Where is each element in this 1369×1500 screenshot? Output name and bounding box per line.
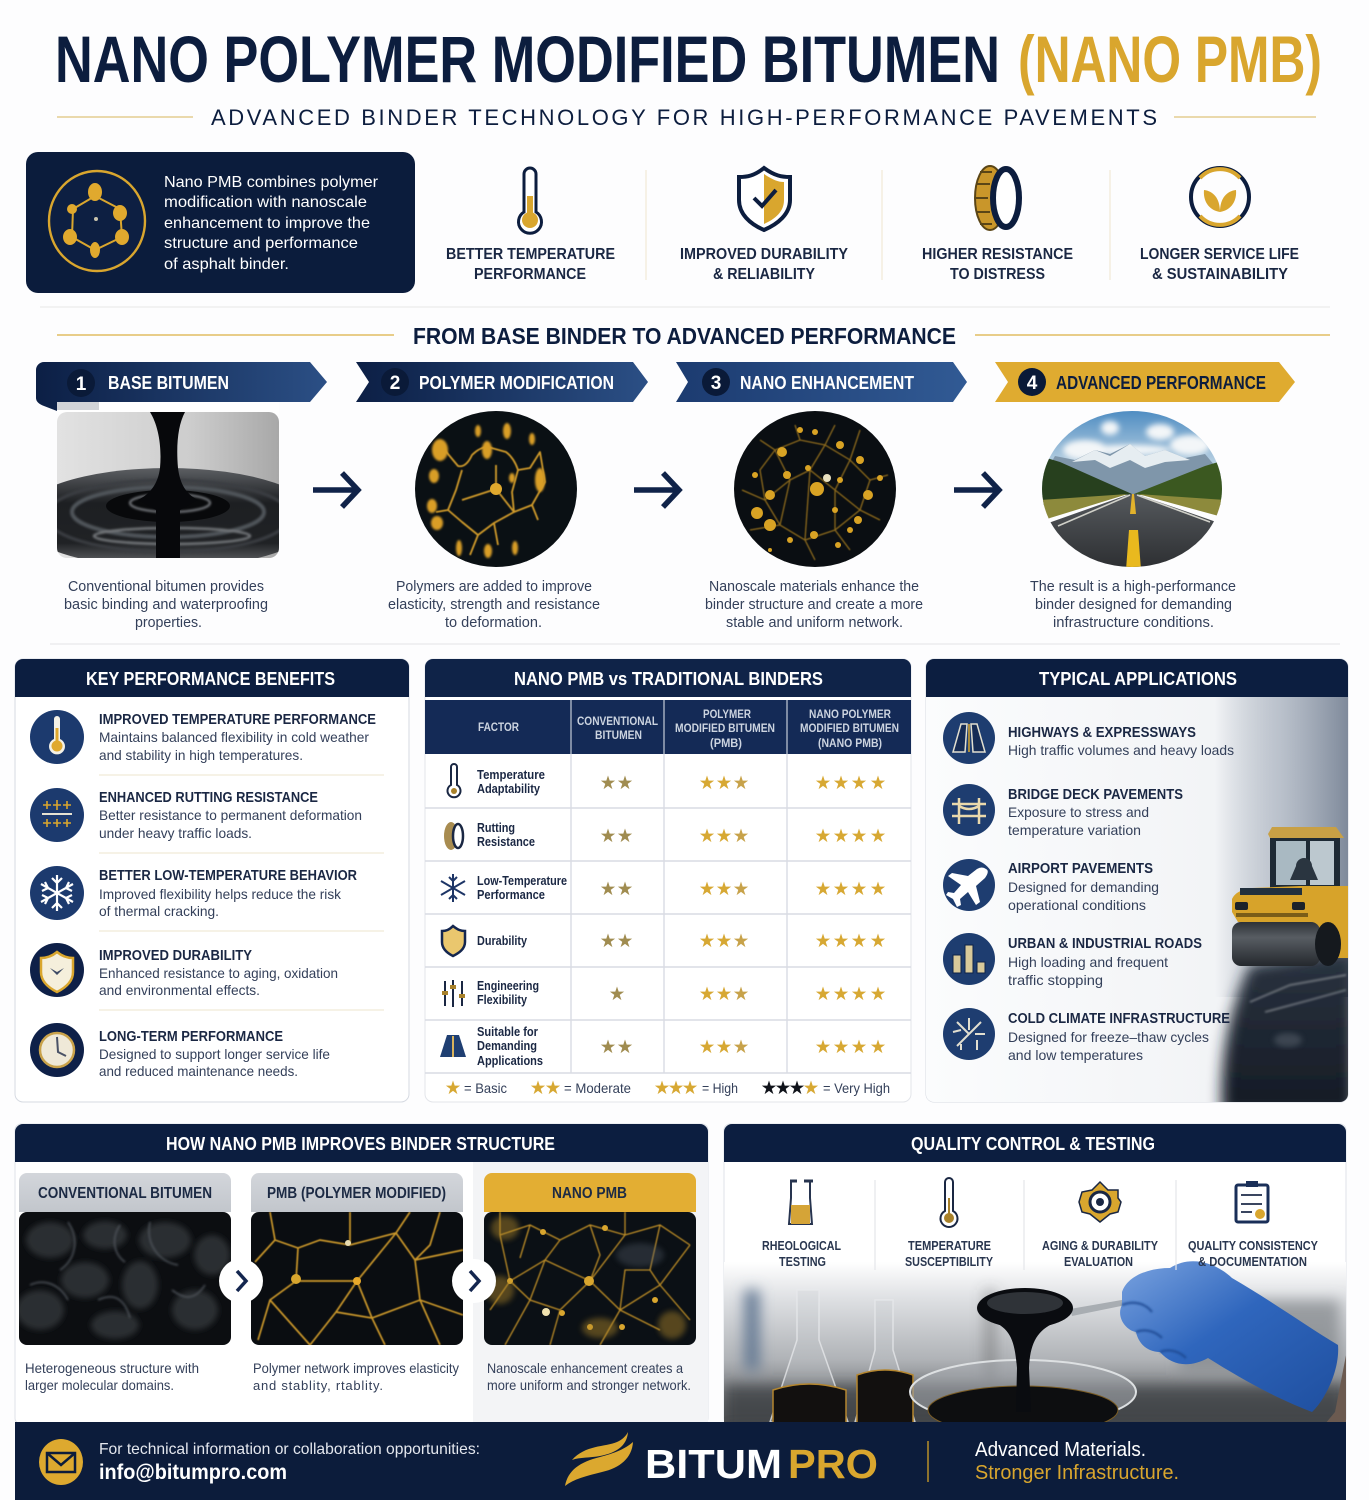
spoon and drip [977, 1288, 1122, 1387]
benefit: low temperature [30, 866, 357, 920]
card: Nano PMB [484, 1173, 696, 1345]
benefit: temperature [30, 710, 376, 764]
row: engineering flexibility: Engineering [477, 979, 539, 993]
test: clipboard: & DOCUMENTATION [1198, 1255, 1307, 1269]
caption 1: basic binding and waterproofing [64, 596, 268, 613]
test: clipboard [1188, 1181, 1319, 1269]
card: conventional bitumen: CONVENTIONAL BITUMEN [38, 1185, 212, 1202]
test: temperature: SUSCEPTIBILITY [905, 1255, 994, 1269]
row: temperature adaptability: Adaptability [477, 782, 540, 796]
row: suitable for demanding applications: Demanding [477, 1039, 537, 1053]
application: bridge deck [943, 784, 1183, 838]
arrow [313, 473, 358, 507]
text: PMB: and stablity, rtablity. [253, 1378, 383, 1393]
caption 2: to deformation. [445, 614, 542, 631]
feature: better temperature performance: BETTER TEMPERATURE [446, 246, 615, 263]
application: bridge deck: Exposure to stress and [1008, 804, 1149, 820]
application: bridge deck: BRIDGE DECK PAVEMENTS [1008, 787, 1183, 803]
legend: = Moderate [564, 1080, 631, 1096]
photo: road roller [1232, 827, 1348, 966]
panel: comparison table: NANO PMB vs TRADITIONAL BINDERS [514, 669, 823, 689]
step 1 ribbon: 1 [76, 374, 87, 395]
row: low-temperature performance [441, 874, 885, 902]
feature: longer service life: & SUSTAINABILITY [1152, 266, 1288, 283]
feature: better temperature performance [446, 168, 615, 283]
caption 1: properties. [135, 614, 202, 631]
step 4 ribbon: 4 [1027, 373, 1038, 394]
step 3 ribbon: NANO ENHANCEMENT [740, 373, 914, 393]
panel: comparison table [425, 659, 911, 1102]
text: Nano PMB: Nanoscale enhancement creates a [487, 1360, 683, 1376]
row: low-temperature performance: Low-Temperature [477, 874, 567, 888]
tagline [975, 1439, 1179, 1484]
row: durability [442, 926, 885, 956]
tagline: Advanced Materials. [975, 1439, 1146, 1461]
table header: NANO POLYMER [809, 707, 891, 721]
heading: process: FROM BASE BINDER TO ADVANCED PERFORMANCE [413, 323, 956, 349]
bowl [909, 1359, 1137, 1422]
title: NANO POLYMER MODIFIED BITUMEN [55, 22, 1000, 96]
row: engineering flexibility: Flexibility [477, 993, 527, 1007]
test: rheological: TESTING [779, 1255, 826, 1269]
application: urban: High loading and frequent [1008, 954, 1168, 970]
step 4 ribbon: ADVANCED PERFORMANCE [1056, 373, 1266, 393]
table header: (NANO PMB) [818, 736, 882, 750]
panel: typical applications: TYPICAL APPLICATIONS [1039, 669, 1237, 689]
feature: higher resistance: TO DISTRESS [950, 266, 1045, 283]
text: conventional: Heterogeneous structure with [25, 1360, 199, 1376]
text: conventional: larger molecular domains. [25, 1377, 174, 1393]
icon: molecule [49, 171, 145, 271]
benefit: rutting: ENHANCED RUTTING RESISTANCE [99, 790, 318, 806]
table header: FACTOR [478, 720, 519, 734]
test: aging gear: EVALUATION [1064, 1255, 1133, 1269]
icon: leaf ring [1191, 168, 1249, 226]
row: suitable for demanding applications: Applications [477, 1054, 543, 1068]
application: airport: Designed for demanding [1008, 879, 1159, 895]
benefit: long-term: Designed to support longer service life [99, 1046, 330, 1062]
benefit: long-term: LONG-TERM PERFORMANCE [99, 1029, 283, 1045]
text: PMB [253, 1360, 459, 1393]
caption 4: binder designed for demanding [1035, 596, 1232, 613]
feature: improved durability [680, 168, 848, 283]
footer [15, 1422, 1346, 1500]
icon: tire [975, 166, 1019, 230]
caption 3: Nanoscale materials enhance the [709, 578, 919, 595]
panel: key performance benefits [15, 659, 409, 1102]
feature: longer service life [1140, 168, 1299, 283]
text: intro: Nano PMB combines polymer [164, 174, 379, 191]
benefit: low temperature: Improved flexibility helps reduce the risk [99, 886, 342, 902]
legend [446, 1080, 890, 1096]
text: Nano PMB: more uniform and stronger network. [487, 1377, 691, 1393]
panel: binder structure [15, 1124, 708, 1424]
image: poured bitumen [57, 402, 279, 558]
row: low-temperature performance: Performance [477, 888, 545, 902]
step 1 ribbon [36, 362, 327, 411]
panel: binder structure: HOW NANO PMB IMPROVES BINDER STRUCTURE [166, 1134, 555, 1154]
application: highways: High traffic volumes and heavy loads [1008, 742, 1234, 758]
benefit: durability: IMPROVED DURABILITY [99, 948, 252, 964]
application: cold climate: Designed for freeze–thaw cycles [1008, 1029, 1209, 1045]
application: cold climate: COLD CLIMATE INFRASTRUCTURE [1008, 1011, 1230, 1027]
test: temperature: TEMPERATURE [908, 1239, 991, 1253]
logo: BITUM [645, 1441, 782, 1487]
legend: = High [702, 1080, 738, 1096]
benefit: rutting: under heavy traffic loads. [99, 825, 252, 841]
legend: = Basic [464, 1080, 507, 1096]
arrow [954, 473, 999, 507]
test: aging gear [1042, 1182, 1159, 1269]
text: intro: of asphalt binder. [164, 256, 289, 273]
feature: improved durability: & RELIABILITY [713, 266, 815, 283]
table header: BITUMEN [595, 728, 642, 742]
application: airport: AIRPORT PAVEMENTS [1008, 861, 1153, 877]
benefit: long-term: and reduced maintenance needs. [99, 1063, 298, 1079]
row: suitable for demanding applications [440, 1025, 885, 1068]
photo: asphalt surface [1221, 950, 1355, 1115]
caption 3: stable and uniform network. [726, 614, 903, 631]
legend: = Very High [823, 1080, 890, 1096]
test: aging gear: AGING & DURABILITY [1042, 1239, 1159, 1253]
logo [565, 1432, 878, 1487]
card: PMB [251, 1173, 463, 1345]
row: rutting resistance: Resistance [477, 835, 535, 849]
step 2 ribbon: POLYMER MODIFICATION [419, 373, 614, 393]
table header: CONVENTIONAL [577, 714, 658, 728]
benefit: rutting: Better resistance to permanent deformation [99, 807, 362, 823]
step 2 ribbon [356, 362, 648, 402]
tagline: Stronger Infrastructure. [975, 1462, 1179, 1484]
icon: shield [739, 168, 790, 230]
benefit: durability: Enhanced resistance to aging, oxidation [99, 965, 338, 981]
caption 1 [64, 578, 268, 631]
photo: lab scene [724, 1261, 1348, 1434]
test: rheological: RHEOLOGICAL [762, 1239, 841, 1253]
panel: quality control and testing: QUALITY CONTROL & TESTING [911, 1134, 1155, 1154]
benefit: long-term [30, 1023, 330, 1079]
text: PMB: Polymer network improves elasticity [253, 1360, 459, 1376]
caption 2: elasticity, strength and resistance [388, 596, 600, 613]
application: urban: URBAN & INDUSTRIAL ROADS [1008, 936, 1202, 952]
test: temperature [905, 1178, 994, 1269]
step 4 ribbon [995, 362, 1295, 402]
card: Nano PMB: NANO PMB [552, 1185, 627, 1202]
row: durability: Durability [477, 934, 527, 948]
icon: envelope [39, 1439, 83, 1485]
chevron connector [219, 1259, 263, 1303]
test: rheological [762, 1181, 841, 1269]
card: conventional bitumen [16, 1173, 231, 1345]
panel: typical applications [926, 659, 1355, 1115]
application: cold climate [943, 1008, 1230, 1063]
benefit: temperature: IMPROVED TEMPERATURE PERFORMANCE [99, 712, 376, 728]
row: rutting resistance [444, 821, 885, 850]
benefit: low temperature: of thermal cracking. [99, 903, 219, 919]
caption 1: Conventional bitumen provides [68, 578, 264, 595]
caption 4 [1030, 578, 1236, 631]
feature: higher resistance [922, 166, 1073, 283]
image: road landscape circle [1040, 411, 1225, 570]
test: clipboard: QUALITY CONSISTENCY [1188, 1239, 1319, 1253]
application: cold climate: and low temperatures [1008, 1047, 1143, 1063]
caption 2: Polymers are added to improve [396, 578, 592, 595]
image: polymer network circle [415, 411, 577, 567]
application: highways: HIGHWAYS & EXPRESSWAYS [1008, 725, 1196, 741]
chevron connector [452, 1259, 496, 1303]
caption 3: binder structure and create a more [705, 596, 923, 613]
step 3 ribbon: 3 [711, 373, 721, 394]
text: intro: structure and performance [164, 235, 358, 252]
benefit: rutting [30, 788, 362, 842]
glove [1120, 1261, 1348, 1424]
benefit: low temperature: BETTER LOW-TEMPERATURE BEHAVIOR [99, 868, 357, 884]
application: urban [943, 933, 1202, 988]
logo: PRO [788, 1441, 878, 1487]
text: conventional [25, 1360, 199, 1393]
card: PMB: PMB (POLYMER MODIFIED) [267, 1185, 446, 1202]
application: highways [943, 712, 1234, 764]
caption 3 [705, 578, 923, 631]
subtitle: ADVANCED BINDER TECHNOLOGY FOR HIGH-PERFORMANCE PAVEMENTS [211, 105, 1157, 130]
table header: POLYMER [703, 707, 751, 721]
text: intro: enhancement to improve the [164, 215, 370, 232]
arrow [634, 473, 679, 507]
feature: better temperature performance: PERFORMANCE [474, 266, 586, 283]
table header: MODIFIED BITUMEN [675, 721, 775, 735]
caption 2 [388, 578, 600, 631]
step 2 ribbon: 2 [390, 373, 400, 394]
contact: info@bitumpro.com [99, 1461, 287, 1484]
panel: key performance benefits: KEY PERFORMANCE BENEFITS [86, 669, 335, 689]
application: airport [943, 859, 1159, 913]
row: engineering flexibility [442, 979, 885, 1007]
panel: quality control and testing [724, 1124, 1348, 1434]
application: airport: operational conditions [1008, 897, 1146, 913]
benefit: temperature: and stability in high temperatures. [99, 747, 303, 763]
row: temperature adaptability: Temperature [477, 768, 545, 782]
icon: thermometer [519, 168, 542, 233]
table header: MODIFIED BITUMEN [800, 721, 899, 735]
application: bridge deck: temperature variation [1008, 822, 1141, 838]
row: temperature adaptability [448, 764, 885, 797]
row: rutting resistance: Rutting [477, 821, 515, 835]
row: suitable for demanding applications: Suitable for [477, 1025, 538, 1039]
feature: higher resistance: HIGHER RESISTANCE [922, 246, 1073, 263]
text: intro [164, 174, 379, 273]
caption 4: infrastructure conditions. [1053, 614, 1214, 631]
text: intro: modification with nanoscale [164, 194, 367, 211]
application: urban: traffic stopping [1008, 972, 1103, 988]
panel: intro [26, 152, 415, 293]
caption 4: The result is a high-performance [1030, 578, 1236, 595]
benefit: durability [30, 943, 338, 998]
table header [425, 700, 911, 754]
contact: For technical information or collaboration opportunities: [99, 1441, 480, 1458]
benefit: temperature: Maintains balanced flexibility in cold weather [99, 729, 369, 745]
feature: improved durability: IMPROVED DURABILITY [680, 246, 848, 263]
feature: longer service life: LONGER SERVICE LIFE [1140, 246, 1299, 263]
benefit: durability: and environmental effects. [99, 982, 260, 998]
image: nano network circle [734, 411, 896, 567]
text: Nano PMB [487, 1360, 691, 1393]
step 3 ribbon [676, 362, 967, 402]
contact [99, 1441, 480, 1484]
step 1 ribbon: BASE BITUMEN [108, 373, 229, 393]
table header: (PMB) [710, 736, 742, 750]
